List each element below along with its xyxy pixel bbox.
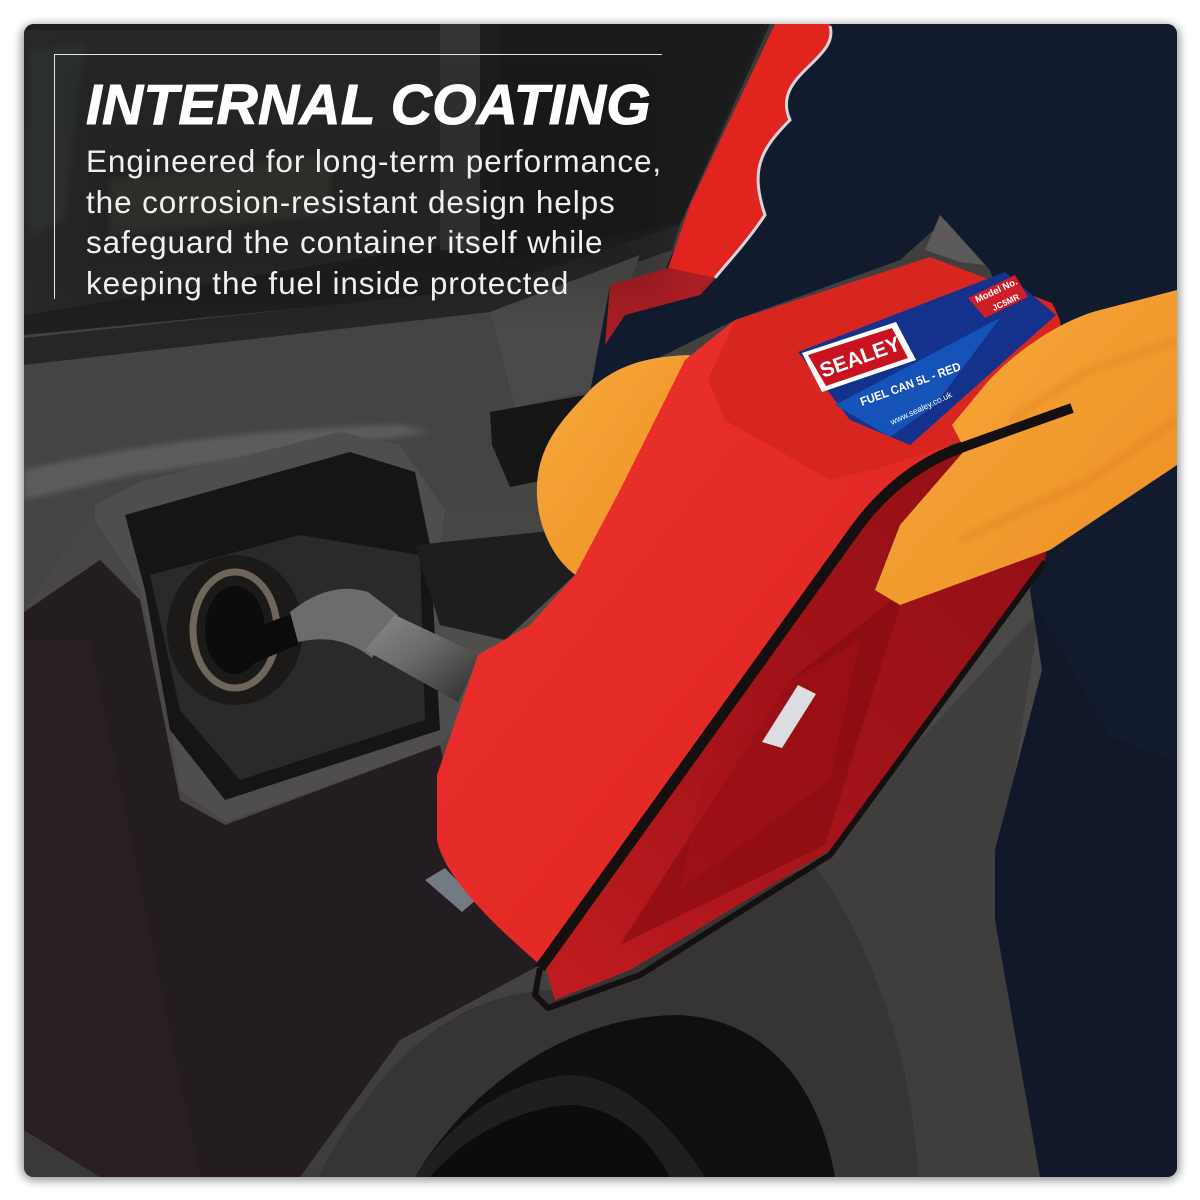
worker trousers [995, 590, 1177, 1177]
can top face [708, 257, 1070, 480]
right glove [875, 290, 1177, 605]
can label [798, 272, 1056, 445]
can label: SEALEY [817, 332, 904, 383]
filler spout [256, 588, 475, 702]
description text: the corrosion-resistant design helps [86, 184, 616, 220]
left glove [537, 355, 690, 578]
can front face [437, 320, 950, 965]
worker torso and sleeve [590, 24, 1177, 760]
rim over glove [955, 408, 1072, 450]
description text: safeguard the container itself while [86, 224, 603, 260]
text backdrop [609, 270, 664, 300]
red fuel can [437, 257, 1072, 1008]
can label: Model No. [974, 277, 1019, 306]
rear wheel arch and tyre [318, 610, 1040, 1177]
title: INTERNAL COATING [86, 73, 651, 137]
description text: keeping the fuel inside protected [86, 265, 569, 301]
decorative bracket lines [54, 54, 662, 299]
can underside [546, 453, 1046, 1000]
can label: JC5MR [991, 292, 1021, 313]
description text: Engineered for long-term performance, [86, 143, 662, 179]
fuel filler recess [95, 395, 585, 912]
description text [86, 143, 662, 301]
can label: www.sealey.co.uk [888, 389, 954, 427]
black rim [536, 442, 963, 972]
can label: FUEL CAN 5L - RED [858, 359, 963, 409]
